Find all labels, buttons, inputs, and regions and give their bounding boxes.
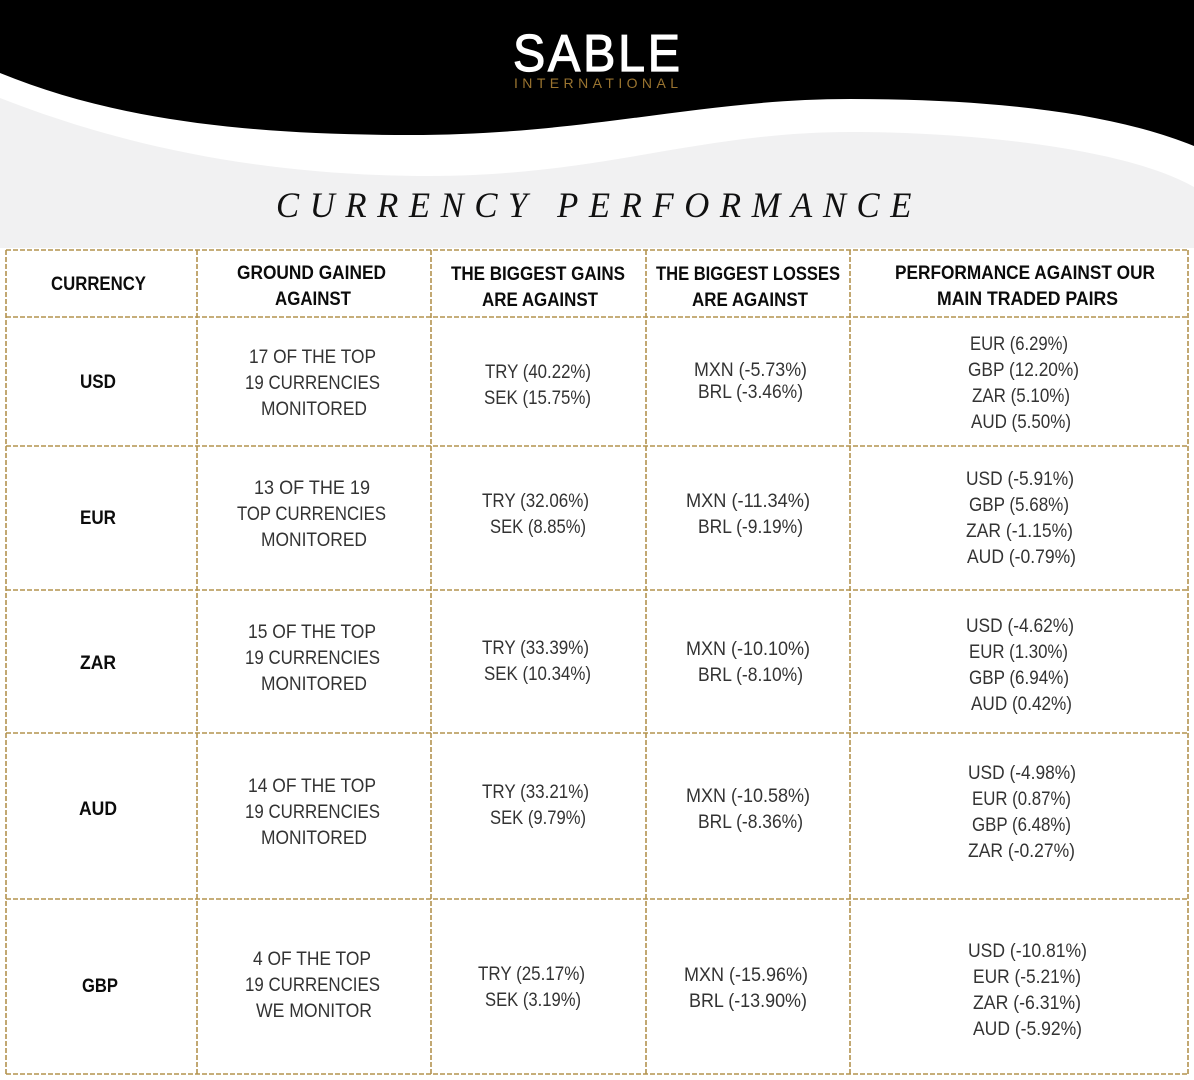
row: EUR: EUR: [80, 508, 116, 529]
row: GBP: TRY (25.17%): [478, 964, 585, 985]
row: GBP: ZAR (-6.31%): [973, 993, 1081, 1014]
table background: [0, 248, 1194, 1080]
table header row: AGAINST: [275, 289, 351, 310]
row: EUR: GBP (5.68%): [969, 495, 1069, 516]
row: GBP: EUR (-5.21%): [973, 967, 1081, 988]
row: EUR: BRL (-9.19%): [698, 517, 803, 538]
row: AUD: AUD: [79, 799, 117, 820]
table header row: ARE AGAINST: [692, 290, 808, 311]
row: EUR: TOP CURRENCIES: [237, 504, 386, 525]
table header row: [51, 263, 1155, 311]
row: GBP: BRL (-13.90%): [689, 991, 807, 1012]
row: AUD: ZAR (-0.27%): [968, 841, 1075, 862]
title: CURRENCY PERFORMANCE: [276, 185, 922, 225]
row: EUR: MXN (-11.34%): [686, 491, 810, 512]
table header row: GROUND GAINED: [237, 263, 386, 284]
table grid: [6, 250, 1188, 1074]
row: USD: GBP (12.20%): [968, 360, 1079, 381]
row: USD: SEK (15.75%): [484, 388, 591, 409]
row: EUR: MONITORED: [261, 530, 367, 551]
row: GBP: MXN (-15.96%): [684, 965, 808, 986]
row: AUD: GBP (6.48%): [972, 815, 1071, 836]
row: AUD: USD (-4.98%): [968, 763, 1076, 784]
row: ZAR: 15 OF THE TOP: [248, 622, 376, 643]
row: GBP: 19 CURRENCIES: [245, 975, 380, 996]
row: AUD: TRY (33.21%): [482, 782, 589, 803]
row: ZAR: EUR (1.30%): [969, 642, 1068, 663]
row: USD: EUR (6.29%): [970, 334, 1068, 355]
row: ZAR: USD (-4.62%): [966, 616, 1074, 637]
row: AUD: EUR (0.87%): [972, 789, 1071, 810]
row: GBP: WE MONITOR: [256, 1001, 372, 1022]
row: GBP: SEK (3.19%): [485, 990, 581, 1011]
row: USD: USD: [80, 372, 116, 393]
row: AUD: MONITORED: [261, 828, 367, 849]
row: ZAR: BRL (-8.10%): [698, 665, 803, 686]
row: EUR: [80, 469, 1076, 568]
row: ZAR: AUD (0.42%): [971, 694, 1072, 715]
row: GBP: 4 OF THE TOP: [253, 949, 371, 970]
row: USD: ZAR (5.10%): [972, 386, 1070, 407]
row: AUD: 19 CURRENCIES: [245, 802, 380, 823]
row: AUD: MXN (-10.58%): [686, 786, 810, 807]
logo: Sable International: INTERNATIONAL: [514, 75, 683, 91]
row: AUD: 14 OF THE TOP: [248, 776, 376, 797]
row: AUD: BRL (-8.36%): [698, 812, 803, 833]
row: ZAR: TRY (33.39%): [482, 638, 589, 659]
row: EUR: ZAR (-1.15%): [966, 521, 1073, 542]
table header row: MAIN TRADED PAIRS: [937, 289, 1118, 310]
white wave band: [0, 70, 1194, 187]
logo: Sable International: SABLE: [513, 24, 683, 82]
row: ZAR: [80, 616, 1074, 715]
row: ZAR: MONITORED: [261, 674, 367, 695]
row: EUR: USD (-5.91%): [966, 469, 1074, 490]
row: ZAR: 19 CURRENCIES: [245, 648, 380, 669]
row: USD: 19 CURRENCIES: [245, 373, 380, 394]
row: AUD: [79, 763, 1076, 862]
row: GBP: USD (-10.81%): [968, 941, 1087, 962]
row: USD: 17 OF THE TOP: [249, 347, 376, 368]
table header row: CURRENCY: [51, 274, 146, 295]
row: ZAR: SEK (10.34%): [484, 664, 591, 685]
row: EUR: AUD (-0.79%): [967, 547, 1076, 568]
row: USD: [80, 334, 1079, 433]
row: USD: TRY (40.22%): [485, 362, 591, 383]
row: GBP: GBP: [82, 976, 118, 997]
row: GBP: [82, 941, 1087, 1040]
table header row: PERFORMANCE AGAINST OUR: [895, 263, 1155, 284]
table header row: THE BIGGEST GAINS: [451, 264, 625, 285]
row: USD: BRL (-3.46%): [698, 382, 803, 403]
row: EUR: TRY (32.06%): [482, 491, 589, 512]
table header row: ARE AGAINST: [482, 290, 598, 311]
row: ZAR: MXN (-10.10%): [686, 639, 810, 660]
row: ZAR: GBP (6.94%): [969, 668, 1069, 689]
black header wave: [0, 0, 1194, 146]
row: AUD: SEK (9.79%): [490, 808, 586, 829]
table header row: THE BIGGEST LOSSES: [656, 264, 840, 285]
row: USD: AUD (5.50%): [971, 412, 1071, 433]
row: EUR: SEK (8.85%): [490, 517, 586, 538]
row: USD: MXN (-5.73%): [694, 360, 807, 381]
row: ZAR: ZAR: [80, 653, 116, 674]
row: USD: MONITORED: [261, 399, 367, 420]
row: EUR: 13 OF THE 19: [254, 478, 370, 499]
row: GBP: AUD (-5.92%): [973, 1019, 1082, 1040]
